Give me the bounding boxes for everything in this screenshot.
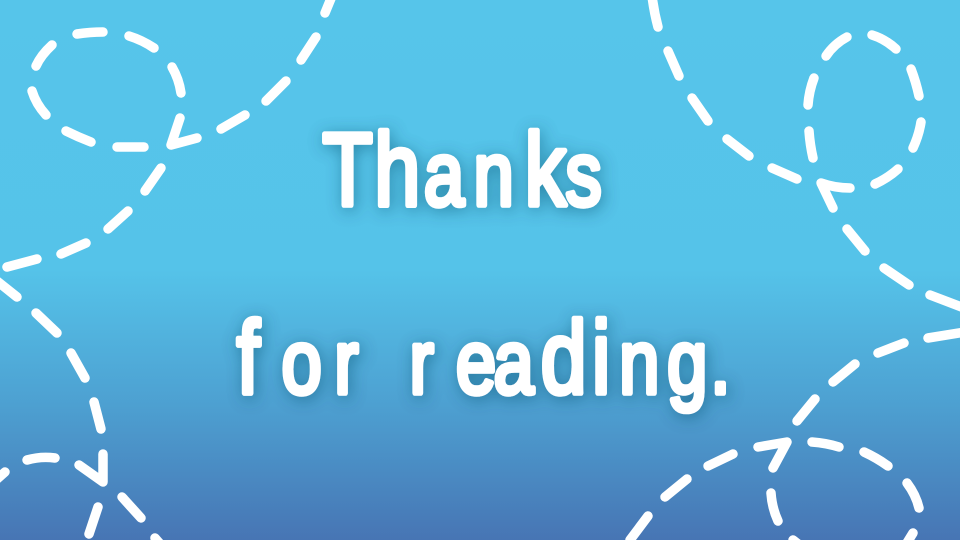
heading line: Thanks: Thanks <box>322 112 602 227</box>
dashed loop arrow: top right <box>652 0 960 308</box>
heading line: for reading.: for reading. <box>237 300 730 415</box>
message text <box>237 112 730 415</box>
dashed loop arrow: top left <box>7 0 332 267</box>
dashed loop arrow: bottom right <box>630 332 960 540</box>
dashed loop arrow: bottom left <box>0 281 162 540</box>
